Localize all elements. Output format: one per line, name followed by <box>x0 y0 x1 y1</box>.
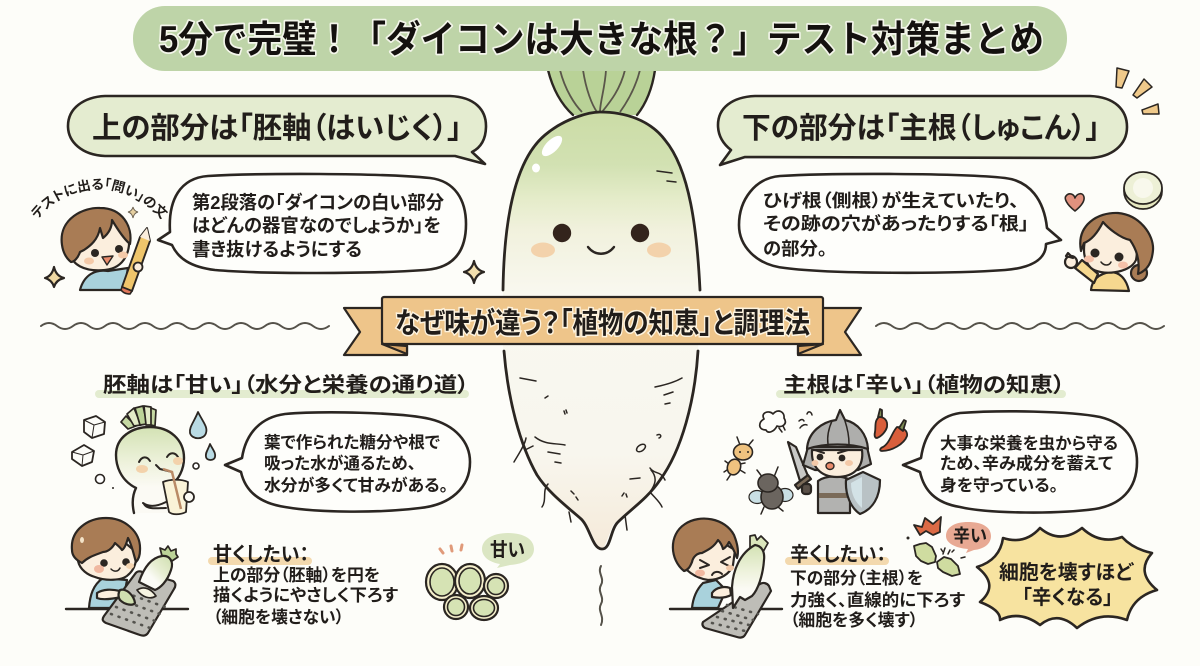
speech bubble: sugar and water: 葉で作られた糖分や根で <box>264 433 440 452</box>
heart <box>1065 194 1084 211</box>
radish upper outline <box>503 112 700 290</box>
spicy method text: （細胞を多く壊す） <box>790 610 918 630</box>
spicy method text <box>785 543 965 630</box>
shield <box>846 472 880 514</box>
sweet method text: 上の部分（胚軸）を円を <box>213 566 380 585</box>
body <box>692 580 726 608</box>
central radish illustration <box>503 68 700 625</box>
wavy divider left <box>41 323 329 329</box>
grater <box>702 583 771 638</box>
radish lower body <box>503 342 698 549</box>
ant <box>724 437 753 480</box>
body <box>80 268 128 290</box>
radish highlights <box>532 133 676 182</box>
helmet and face <box>803 447 871 470</box>
table line <box>66 608 188 610</box>
head <box>680 532 735 580</box>
speech bubble: test question <box>158 174 466 273</box>
glass and straw <box>163 480 188 514</box>
wavy line below radish <box>600 566 602 625</box>
boy grating gently <box>66 518 188 636</box>
wavy divider right <box>876 323 1164 329</box>
title <box>133 6 1067 71</box>
grater <box>103 571 175 636</box>
sweet method text: 甘くしたい： <box>213 543 309 566</box>
curved caption: question sentence: テストに出る「問い」の文 <box>31 178 168 220</box>
girl head <box>1084 222 1137 273</box>
girl pointing <box>1065 213 1153 291</box>
ice cubes <box>72 416 105 466</box>
heading bubble: main root: 下の部分は「主根（しゅこん）」 <box>742 112 1100 145</box>
radish leaves <box>548 68 655 115</box>
heading bubble: main root <box>718 96 1127 165</box>
speech bubble: stored pungency: 身を守っている。 <box>940 476 1058 495</box>
heading bubble: hypocotyl: 上の部分は「胚軸（はいじく）」 <box>92 112 462 145</box>
radish on grater <box>137 546 178 598</box>
puff of smoke <box>760 411 812 432</box>
ribbon banner: なぜ味が違う？「植物の知恵」と調理法 <box>395 306 810 340</box>
head <box>78 530 136 580</box>
radish upper body <box>503 112 700 300</box>
bubbles <box>96 474 104 484</box>
burst <box>914 517 941 535</box>
speech bubble: sugar and water <box>225 412 470 512</box>
boy grating strongly <box>670 519 782 638</box>
speech bubble: main root: その跡の穴があったりする「根」 <box>763 213 1029 234</box>
sparkles near boy <box>45 207 138 287</box>
rays <box>440 545 462 553</box>
speech bubble: main root: ひげ根（側根）が生えていたり、 <box>763 190 1019 211</box>
radish lower outline and root hairs <box>504 351 698 549</box>
subheading: main root is spicy: 主根は「辛い」（植物の知恵） <box>783 374 1065 397</box>
knight defending with insects and peppers <box>724 409 907 514</box>
cucumber slice <box>1124 172 1162 209</box>
cells <box>426 564 508 620</box>
sweet method text <box>208 543 398 627</box>
starburst callout <box>977 528 1157 628</box>
speech bubble: sugar and water: 水分が多くて甘みがある。 <box>264 475 448 495</box>
knight body <box>818 476 850 513</box>
beetle <box>749 467 793 514</box>
spicy method text: 下の部分（主根）を <box>790 569 923 588</box>
speech bubble: stored pungency: 大事な栄養を虫から守る <box>940 433 1118 453</box>
spicy method text: 辛くしたい： <box>790 543 886 566</box>
radish character drinking <box>72 406 215 514</box>
speech bubble: main root: の部分。 <box>763 239 827 259</box>
leaves <box>121 406 156 429</box>
emphasis rays <box>1116 68 1159 114</box>
intact cells and sweet tag: 甘い <box>490 539 525 561</box>
title: 5分で完璧！「ダイコンは大きな根？」テスト対策まとめ <box>159 19 1044 60</box>
speech bubble: sugar and water: 吸った水が通るため、 <box>264 453 416 473</box>
speech bubble: stored pungency: ため、辛み成分を蓄えて <box>940 453 1113 473</box>
broken cells and spicy tag <box>906 517 991 576</box>
speech bubble: stored pungency <box>903 411 1137 513</box>
spicy method text: 力強く、直線的に下ろす <box>790 591 965 610</box>
starburst callout: 細胞を壊すほど <box>999 561 1134 584</box>
peppers <box>875 409 907 451</box>
table line <box>670 608 782 610</box>
heading bubble: hypocotyl <box>68 96 486 164</box>
broken cells and spicy tag: 辛い <box>953 526 987 546</box>
head <box>70 222 129 270</box>
intact cells and sweet tag <box>426 533 534 620</box>
sweet bubble <box>482 533 534 568</box>
face <box>139 453 178 472</box>
starburst callout: 「辛くなる」 <box>1022 586 1113 609</box>
speech bubble: test question: 書き抜けるようにする <box>192 239 362 260</box>
subheading: hypocotyl is sweet: 胚軸は「甘い」（水分と栄養の通り道） <box>103 374 469 397</box>
sweet method text: （細胞を壊さない） <box>213 608 344 627</box>
arm <box>712 587 731 598</box>
radish <box>732 535 768 608</box>
water drops <box>190 412 206 438</box>
sweet method text: 描くようにやさしく下ろす <box>213 586 398 605</box>
speech bubble: test question: 第2段落の「ダイコンの白い部分 <box>192 192 444 213</box>
spicy bubble <box>946 522 991 553</box>
ribbon banner <box>344 297 861 355</box>
body <box>89 578 127 608</box>
arm and piece <box>97 590 121 599</box>
girl body and arm <box>1091 272 1129 291</box>
speech bubble: test question: はどんの器官なのでしょうか」を <box>192 215 441 236</box>
body <box>116 427 184 513</box>
pencil <box>122 228 150 291</box>
sparkle beside radish <box>464 261 484 283</box>
radish face <box>531 224 671 258</box>
broken cells <box>914 543 936 564</box>
speech bubble: main root <box>739 174 1061 273</box>
boy with pencil <box>62 208 150 294</box>
sword <box>788 442 808 481</box>
